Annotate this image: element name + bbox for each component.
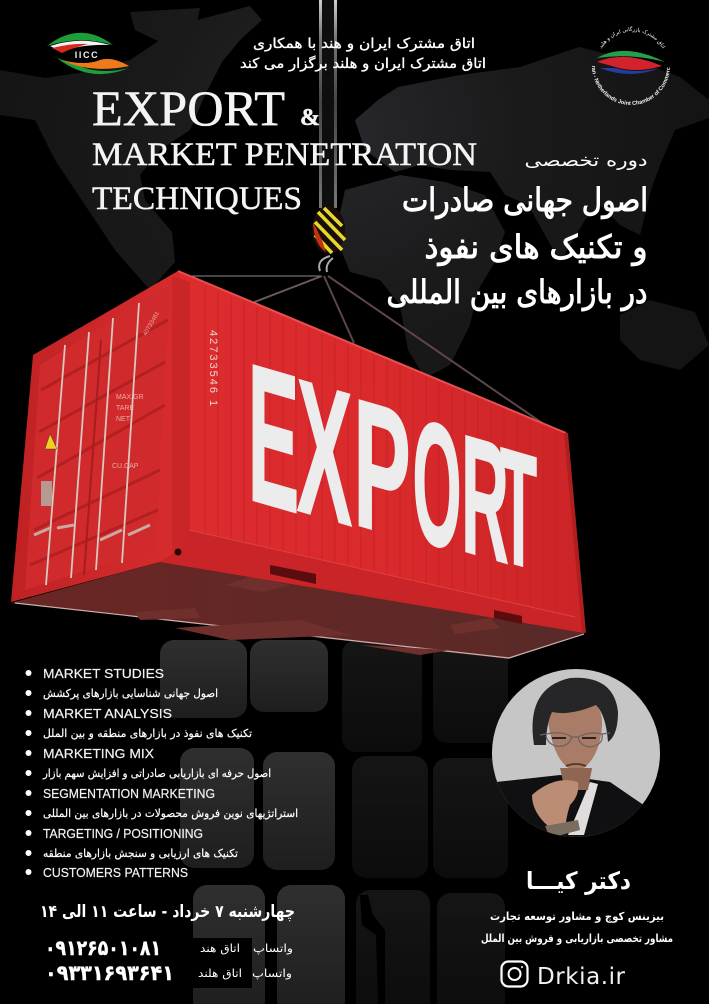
contact phones: واتساپ <box>252 967 292 980</box>
EXPORT lettering: R <box>461 400 509 601</box>
door markings: MAX.GR <box>116 394 144 401</box>
speaker roles: بیزینس کوچ و مشاور توسعه تجارت <box>490 910 664 924</box>
organisers text: اتاق مشترک ایران و هلند برگزار می کند <box>240 55 486 72</box>
door markings: NET <box>116 416 131 423</box>
lifting slings <box>190 276 545 425</box>
icon: instagram <box>502 962 528 986</box>
English title <box>92 80 477 217</box>
logo: Iran-Netherlands chamber: اتاق مشترک بازرگانی ایران و هلند <box>600 26 666 48</box>
container underside <box>11 562 584 659</box>
suit <box>497 775 642 837</box>
EXPORT lettering: P <box>353 360 411 580</box>
EXPORT lettering <box>248 321 537 606</box>
English title: MARKET PENETRATION <box>92 137 477 173</box>
contact phones: اتاق هلند <box>198 967 242 980</box>
Persian topics: تکنیک های نفوذ در بازارهای منطقه و بین الملل <box>43 727 252 740</box>
Persian topics: اصول حرفه ای بازاریابی صادراتی و افزایش سهم بازار <box>42 767 271 780</box>
warning label <box>45 434 57 449</box>
door markings: 40733481 <box>143 310 161 337</box>
contact phones <box>45 936 293 988</box>
course topics list <box>26 666 298 880</box>
bullets <box>26 670 32 875</box>
crane hook <box>312 206 345 272</box>
contact phones: ۰۹۱۲۶۵۰۱۰۸۱ <box>45 936 161 960</box>
crane cable <box>319 0 337 208</box>
Persian topics: استراتژیهای نوین فروش محصولات در بازارهای بین المللی <box>43 807 298 820</box>
corner post <box>172 276 190 552</box>
English topics <box>43 666 215 880</box>
EXPORT lettering: T <box>500 413 537 606</box>
door markings: CU.CAP <box>112 463 139 470</box>
English topics: MARKETING MIX <box>43 746 154 761</box>
background tiles <box>160 640 508 1004</box>
Persian title <box>386 151 648 311</box>
lower rail <box>160 530 584 633</box>
speaker roles <box>481 910 673 945</box>
Persian topics <box>42 687 298 860</box>
neck and face <box>548 705 602 768</box>
container side wall <box>160 270 584 633</box>
English topics: MARKET STUDIES <box>43 666 164 681</box>
EXPORT lettering: E <box>248 321 299 555</box>
Persian topics: اصول جهانی شناسایی بازارهای پرکشش <box>43 687 218 700</box>
English topics: CUSTOMERS PATTERNS <box>43 865 188 880</box>
contact phones: واتساپ <box>253 942 293 955</box>
date and time: چهارشنبه ۷ خرداد - ساعت ۱۱ الی ۱۴ <box>40 902 295 922</box>
side serial number: 42733546 1 <box>207 330 219 408</box>
English topics: SEGMENTATION MARKETING <box>43 786 215 801</box>
speaker portrait <box>490 668 662 845</box>
organisers text <box>240 36 486 72</box>
world map <box>0 6 709 378</box>
corrugated ribs <box>204 286 504 600</box>
Persian title: و تکنیک های نفوذ <box>424 228 648 266</box>
Persian title: دوره تخصصی <box>524 151 648 171</box>
English topics: MARKET ANALYSIS <box>43 706 172 721</box>
Persian title: در بازارهای بین المللی <box>386 273 648 311</box>
EXPORT lettering: X <box>297 339 352 567</box>
contact phones: اتاق هند <box>200 942 240 955</box>
speaker name: دکتر کیـــا <box>526 867 631 895</box>
English title: EXPORT <box>92 80 285 136</box>
hair <box>532 678 618 745</box>
EXPORT lettering: O <box>412 381 462 589</box>
glasses <box>540 733 610 747</box>
website: Drkia.ir <box>537 964 626 990</box>
Persian title: اصول جهانی صادرات <box>402 181 648 219</box>
door markings: TARE <box>116 405 134 412</box>
English topics: TARGETING / POSITIONING <box>43 826 203 841</box>
hand <box>532 780 578 826</box>
door markings <box>112 310 161 470</box>
logo: Iran-Netherlands chamber <box>592 26 670 106</box>
door locking rods <box>34 303 150 585</box>
grey plate <box>41 481 52 506</box>
Persian topics: تکنیک های ارزیابی و سنجش بازارهای منطقه <box>43 847 238 860</box>
container door face <box>11 271 182 602</box>
shipping container <box>11 270 584 659</box>
English title: TECHNIQUES <box>92 181 302 217</box>
English title: & <box>300 105 320 131</box>
logo: IICC <box>47 33 129 74</box>
contact phones: ۰۹۳۳۱۶۹۳۶۴۱ <box>45 961 174 985</box>
organisers text: اتاق مشترک ایران و هند با همکاری <box>253 36 475 52</box>
shirt <box>568 782 598 835</box>
logo: IICC: IICC <box>75 50 99 60</box>
